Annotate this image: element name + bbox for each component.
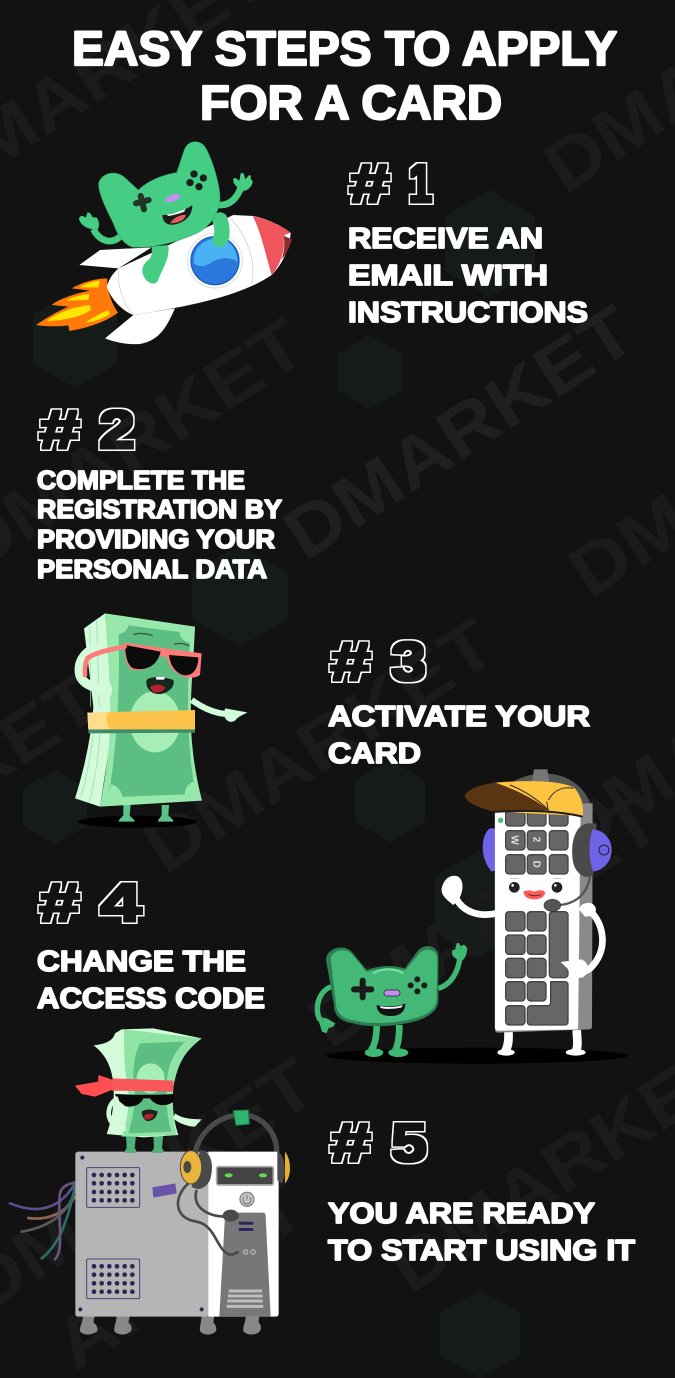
step 5 number: 5 xyxy=(391,1113,427,1173)
step 1 text: INSTRUCTIONS xyxy=(348,297,588,329)
key labels xyxy=(509,835,541,868)
step 3 number xyxy=(330,632,426,692)
step 3 text: CARD xyxy=(328,738,421,770)
step 2 text: COMPLETE THE xyxy=(37,465,245,495)
illustration: monster riding a rocket xyxy=(36,142,292,344)
step 1 number: 1 xyxy=(409,154,432,214)
rocket window xyxy=(188,233,242,288)
green monster xyxy=(79,142,253,284)
computer case xyxy=(75,1152,279,1317)
key labels: D xyxy=(530,861,541,868)
step 4 text: ACCESS CODE xyxy=(37,983,265,1015)
step 4 number: # xyxy=(39,873,80,933)
step 3 number: # xyxy=(330,632,371,692)
cash character on computer xyxy=(75,1028,202,1153)
headset on computer xyxy=(178,1110,290,1255)
yellow band xyxy=(87,710,195,733)
rocket flame xyxy=(36,278,118,331)
background watermark pattern: DMARKET xyxy=(130,603,509,888)
title xyxy=(72,23,617,130)
step 2 text: REGISTRATION BY xyxy=(37,494,282,524)
keyboard face xyxy=(509,878,562,899)
step 1 text: EMAIL WITH xyxy=(348,260,548,292)
legs xyxy=(119,805,173,822)
step 5 text xyxy=(328,1198,635,1267)
computer front panel xyxy=(217,1167,273,1306)
keyboard body xyxy=(495,803,593,1033)
step 2 text xyxy=(37,465,282,584)
illustration: keyboard with headset and small monster xyxy=(317,769,628,1064)
illustration: banknote stack with sunglasses xyxy=(75,613,247,828)
rocket fins and body xyxy=(79,215,292,344)
step 2 number: 2 xyxy=(99,400,135,460)
key labels: W xyxy=(509,835,520,845)
face with sunglasses xyxy=(85,633,202,694)
title: FOR A CARD xyxy=(200,77,502,130)
step 5 number xyxy=(330,1113,427,1173)
note stack body xyxy=(75,613,202,807)
computer vents xyxy=(78,1156,204,1311)
background watermark pattern: DMARKET xyxy=(295,778,674,1063)
step 4 text xyxy=(37,946,265,1015)
step 5 text: TO START USING IT xyxy=(328,1235,635,1267)
step 1 number: # xyxy=(349,154,390,214)
keyboard legs xyxy=(505,1030,577,1052)
step 3 text: ACTIVATE YOUR xyxy=(328,701,590,733)
yellow and brown cap xyxy=(465,781,583,817)
step 2 number: # xyxy=(39,400,80,460)
headset band and left cup xyxy=(483,769,590,872)
keyboard arms xyxy=(442,876,602,978)
step 3 text xyxy=(328,701,590,770)
step 2 text: PERSONAL DATA xyxy=(37,554,267,584)
keyboard keys xyxy=(506,810,568,1025)
key labels: 2 xyxy=(530,837,541,843)
step 4 number: 4 xyxy=(100,873,142,933)
ground shadow xyxy=(78,816,197,828)
step 2 number xyxy=(39,400,135,460)
step 4 text: CHANGE THE xyxy=(37,946,246,978)
background watermark pattern: DMARKET xyxy=(270,290,649,575)
title: EASY STEPS TO APPLY xyxy=(72,23,617,76)
step 4 number xyxy=(39,873,142,933)
step 5 number: # xyxy=(330,1113,371,1173)
illustration: banknote on computer tower xyxy=(10,1028,290,1334)
arms and hands xyxy=(79,647,247,722)
step 1 text: RECEIVE AN xyxy=(348,223,543,255)
headset right cup and mic xyxy=(544,823,612,911)
step 1 number xyxy=(349,154,432,214)
step 5 text: YOU ARE READY xyxy=(328,1198,595,1230)
small green monster xyxy=(317,943,467,1057)
ground shadow xyxy=(326,1048,628,1064)
step 2 text: PROVIDING YOUR xyxy=(37,524,275,554)
step 1 text xyxy=(348,223,588,329)
step 3 number: 3 xyxy=(391,632,426,692)
computer feet xyxy=(80,1315,261,1334)
computer cables xyxy=(10,1183,75,1259)
